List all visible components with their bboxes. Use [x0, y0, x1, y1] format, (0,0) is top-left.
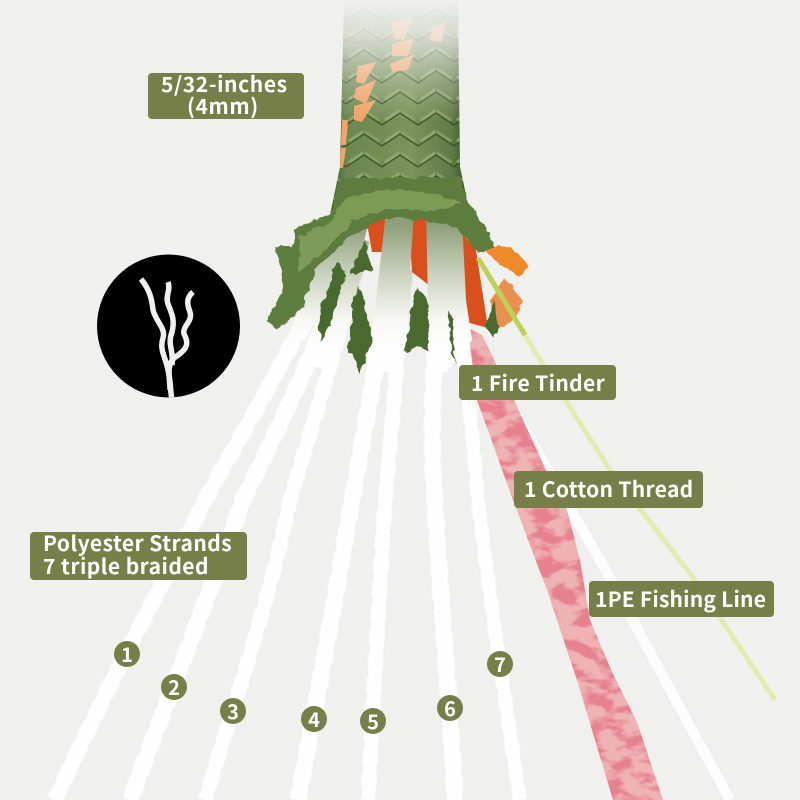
badge 6: 6	[444, 693, 456, 722]
badge 4: 4	[308, 704, 320, 733]
label: polyester strands: 7 triple braided	[43, 551, 209, 581]
orange inner core	[365, 212, 530, 330]
braided rope body	[330, 0, 470, 215]
badge 6	[437, 695, 463, 721]
yellow line highlight over sheath	[478, 258, 525, 335]
strand 4	[298, 222, 402, 800]
label: 5/32-inches (4mm)	[148, 73, 304, 119]
badge 1	[114, 641, 140, 667]
yellow PE fishing line	[478, 258, 775, 700]
badge 7	[487, 651, 513, 677]
green sheath fringe	[318, 240, 498, 374]
polyester strands 1 to 7	[55, 222, 520, 800]
white cotton thread strand	[470, 335, 730, 800]
strand 7	[452, 240, 520, 800]
strand 3	[205, 240, 362, 800]
label: polyester strands	[30, 532, 247, 580]
badge 2: 2	[168, 672, 180, 701]
frayed sheath skirt	[267, 178, 493, 330]
label: 5/32-inches (4mm): (4mm)	[187, 91, 259, 121]
label: 1PE fishing line: 1PE Fishing Line	[595, 584, 766, 614]
badge 3: 3	[227, 696, 239, 725]
black inset circle with three strands	[97, 254, 240, 400]
label: polyester strands: Polyester Strands	[43, 528, 232, 558]
badge 7: 7	[494, 649, 506, 678]
badge 5: 5	[367, 706, 379, 735]
label: 5/32-inches (4mm): 5/32-inches	[161, 69, 288, 99]
top fade	[335, 0, 470, 120]
strand 2	[130, 245, 350, 800]
label: 1 fire tinder: 1 Fire Tinder	[471, 368, 605, 398]
red fire tinder strand	[468, 328, 663, 800]
label: 1 cotton thread: 1 Cotton Thread	[524, 474, 693, 504]
strand 1	[55, 255, 335, 800]
badge 4	[301, 706, 327, 732]
badge 3	[220, 698, 246, 724]
strand 6	[432, 225, 455, 800]
badge 2	[161, 674, 187, 700]
strand 5	[368, 270, 405, 800]
upper strand wedges under the sheath	[284, 212, 472, 372]
badge 1: 1	[121, 639, 133, 668]
orange braid stripe	[340, 18, 446, 168]
badge 5	[360, 708, 386, 734]
